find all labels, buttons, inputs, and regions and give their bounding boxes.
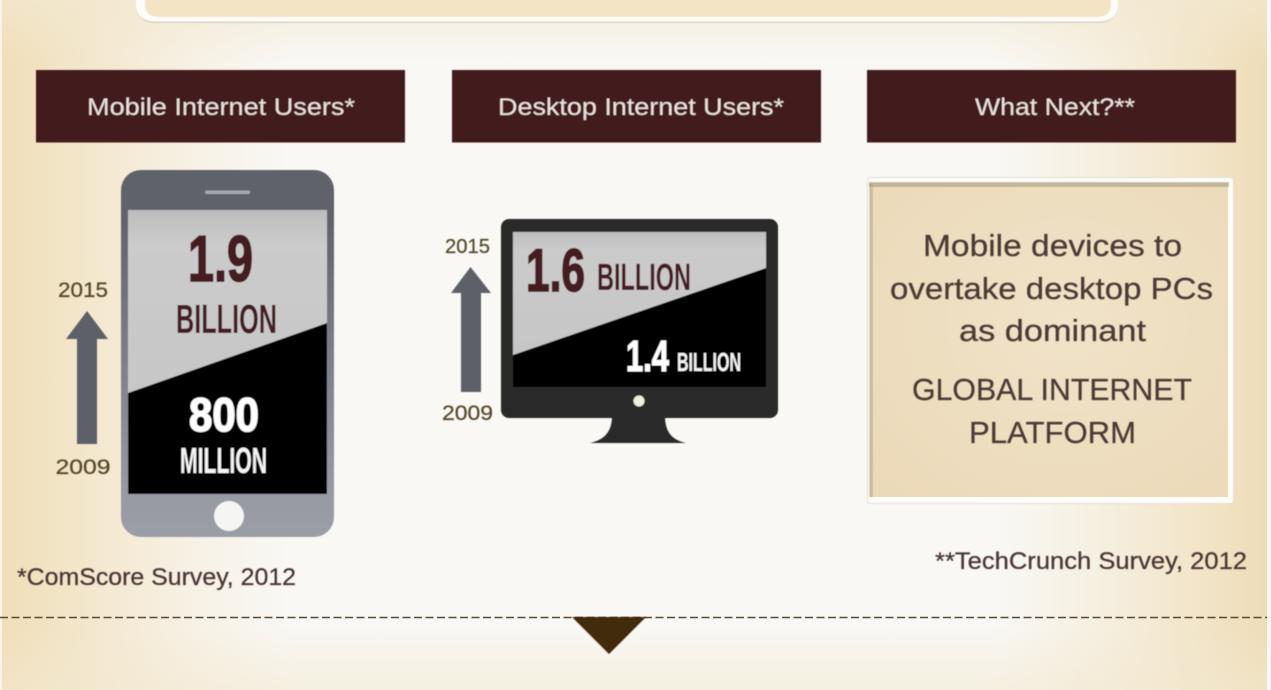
icon: desktop monitor with user figures: BILLION <box>597 257 691 299</box>
panel: what next callout: GLOBAL INTERNET <box>912 372 1192 407</box>
icon: desktop monitor with user figures <box>501 219 778 443</box>
desktop year arrow: 2015 <box>445 236 490 258</box>
header: desktop internet users: Desktop Internet Users* <box>498 94 784 121</box>
icon: smartphone with user figures: 800 <box>189 388 259 441</box>
icon: desktop monitor with user figures: 1.4 <box>626 332 669 381</box>
header: what next <box>867 70 1236 142</box>
mobile year arrow: 2015 <box>58 279 108 302</box>
icon: desktop monitor with user figures: BILLION <box>677 347 741 377</box>
header: what next: What Next?** <box>975 94 1135 121</box>
header: mobile internet users <box>36 70 405 142</box>
icon: smartphone with user figures: BILLION <box>176 296 277 342</box>
header: mobile internet users: Mobile Internet Users* <box>87 94 355 121</box>
footnote: comscore: *ComScore Survey, 2012 <box>17 564 296 591</box>
mobile year arrow <box>56 279 110 479</box>
desktop year arrow <box>442 236 493 425</box>
icon: desktop monitor with user figures: 1.6 <box>526 237 585 304</box>
desktop year arrow: 2009 <box>442 402 493 425</box>
panel: what next callout: overtake desktop PCs <box>890 271 1213 306</box>
header: desktop internet users <box>452 70 821 142</box>
top panel remnant <box>136 0 1118 23</box>
icon: smartphone with user figures <box>121 170 334 537</box>
panel: what next callout: Mobile devices to <box>923 228 1182 263</box>
panel: what next callout: as dominant <box>959 313 1146 348</box>
mobile year arrow: 2009 <box>56 456 110 479</box>
icon: smartphone with user figures: 1.9 <box>188 222 253 295</box>
arrow: section pointer <box>572 617 646 654</box>
panel: what next callout: PLATFORM <box>969 415 1136 450</box>
icon: smartphone with user figures: MILLION <box>180 440 267 481</box>
footnote: techcrunch: **TechCrunch Survey, 2012 <box>935 548 1247 575</box>
panel: what next callout <box>868 178 1234 504</box>
